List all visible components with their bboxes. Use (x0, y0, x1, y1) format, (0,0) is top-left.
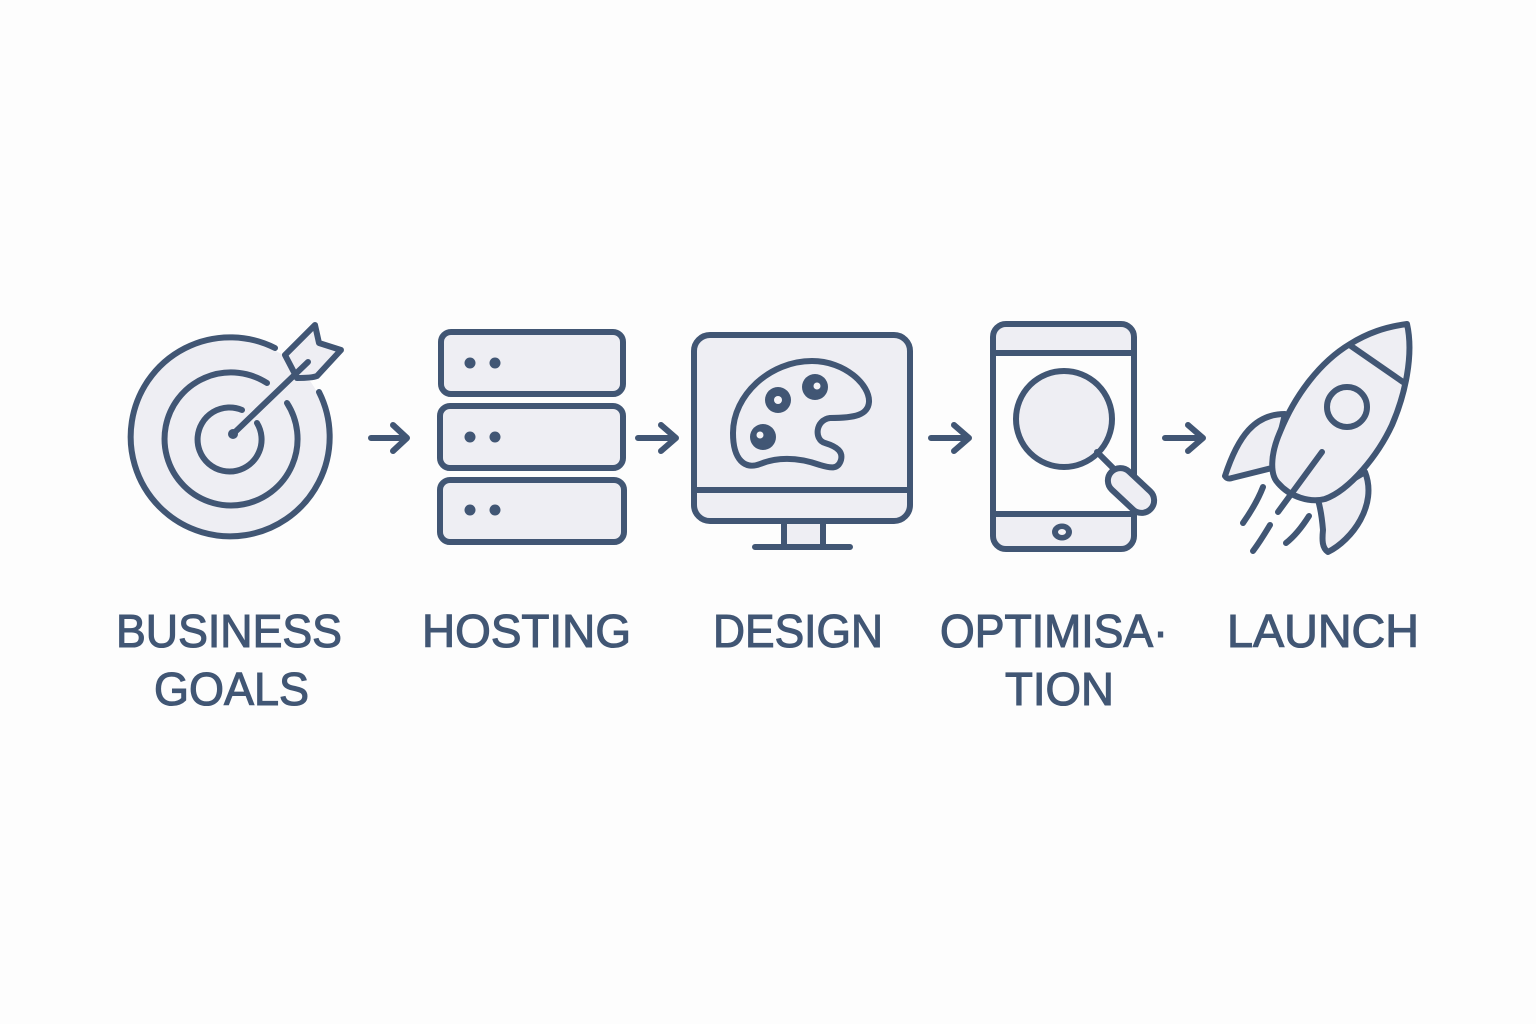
icon: phone with magnifier (993, 324, 1159, 549)
label: design: DESIGN (713, 605, 883, 657)
icon: target with arrow (131, 325, 341, 536)
icon: monitor with palette (694, 335, 910, 547)
arrow: hosting to design (638, 425, 676, 451)
icon: server stack (440, 332, 624, 542)
arrow: design to optimisation (931, 425, 969, 451)
label: business goals: BUSINESS (116, 605, 342, 657)
label: optimisation: OPTIMISA· (940, 605, 1168, 657)
label: optimisation: TION (1005, 663, 1114, 715)
label: hosting: HOSTING (422, 605, 631, 657)
label: business goals: GOALS (154, 663, 309, 715)
icon: rocket (1225, 324, 1409, 552)
label: optimisation (940, 605, 1168, 715)
arrow: goals to hosting (371, 425, 407, 451)
label: launch: LAUNCH (1227, 605, 1419, 657)
label: business goals (116, 605, 342, 715)
arrow: optimisation to launch (1165, 425, 1203, 451)
